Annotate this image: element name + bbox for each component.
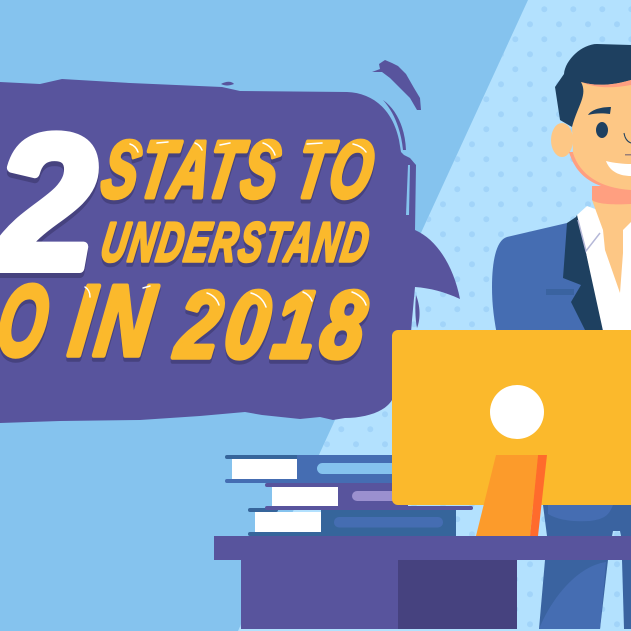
title: understand: UNDERSTAND bbox=[97, 212, 376, 273]
middle book bbox=[265, 483, 412, 508]
title: stats to: STATS TO bbox=[96, 129, 382, 219]
desk bbox=[214, 536, 631, 629]
left trouser highlight bbox=[539, 562, 606, 629]
monitor logo circle bbox=[490, 385, 544, 439]
trousers and lower body bbox=[539, 505, 631, 629]
right trouser leg bbox=[622, 560, 631, 629]
eyebrow bbox=[588, 107, 611, 115]
nostril bbox=[625, 154, 631, 156]
title: understand: UNDERSTAND bbox=[97, 216, 376, 277]
speech bubble: purple brush shape bbox=[0, 60, 460, 423]
neck shadow bbox=[592, 186, 631, 204]
desk drawer panel bbox=[398, 560, 517, 629]
ear bbox=[551, 123, 573, 157]
lower jacket highlight bbox=[548, 505, 613, 521]
brush dash near tail bbox=[415, 295, 420, 328]
brush splatter top right bbox=[372, 60, 421, 110]
smile bbox=[606, 161, 631, 176]
left trouser leg bbox=[539, 560, 608, 629]
monitor stand side bbox=[530, 455, 547, 536]
collar crease bbox=[578, 220, 600, 251]
bottom book bbox=[248, 508, 456, 536]
title: in 2018: IN bbox=[64, 264, 165, 376]
pocket line bbox=[546, 289, 574, 295]
shirt bbox=[577, 206, 631, 340]
lower jacket bbox=[543, 505, 631, 536]
title: in 2018: 2018 bbox=[169, 273, 378, 378]
title: stats to: STATS TO bbox=[96, 125, 382, 215]
title: in 2018: IN bbox=[64, 268, 165, 380]
background: pale dotted light beam bbox=[238, 0, 631, 631]
desk leg bbox=[241, 560, 398, 629]
hair bbox=[555, 44, 631, 127]
face bbox=[572, 80, 631, 190]
jacket bbox=[492, 223, 631, 340]
monitor bbox=[392, 330, 631, 536]
desk top bbox=[214, 536, 631, 560]
face shadow bbox=[569, 150, 631, 191]
monitor stand bbox=[476, 455, 538, 536]
neck bbox=[592, 187, 631, 293]
top book bbox=[225, 455, 407, 483]
brush arc beside bubble bbox=[383, 100, 406, 150]
person bbox=[492, 44, 631, 340]
title: glossy letter highlights bbox=[85, 142, 366, 307]
brush streak in bubble edge bbox=[406, 165, 410, 215]
brush dash top bbox=[221, 82, 234, 86]
books bbox=[225, 455, 473, 536]
title: in 2018: 2018 bbox=[169, 277, 378, 382]
monitor back bbox=[392, 330, 631, 505]
title: in 2018 bbox=[0, 264, 378, 382]
dark lapel bbox=[563, 215, 605, 340]
middle book base strip bbox=[265, 506, 473, 510]
eye bbox=[596, 122, 608, 138]
nose bbox=[624, 133, 631, 143]
forehead shadow bbox=[581, 80, 631, 87]
